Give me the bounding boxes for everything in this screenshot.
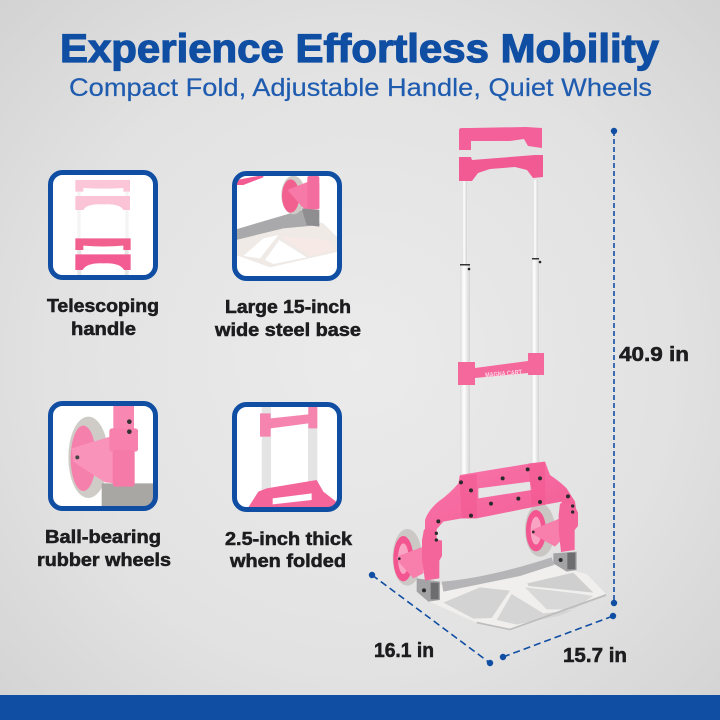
title: Experience Effortless Mobility: [60, 27, 660, 71]
panel: folded thickness: [225, 404, 353, 571]
caption: [225, 529, 353, 571]
steel base plate: [417, 557, 606, 630]
caption: when folded: [229, 551, 346, 571]
frame: [50, 172, 156, 278]
caption: Telescoping: [47, 296, 159, 316]
thumbnail: steel base: [234, 174, 340, 278]
middle bracket with logo: [458, 353, 544, 385]
dimension: height: [611, 128, 689, 606]
caption: Large 15-inch: [225, 297, 351, 317]
panel: steel base: [214, 174, 361, 340]
thumbnail: telescoping handle: [50, 172, 156, 278]
panel: rubber wheels: [37, 404, 171, 570]
pink frame: [397, 462, 578, 581]
caption: rubber wheels: [37, 550, 171, 570]
telescoping poles: [460, 180, 541, 480]
caption: 2.5-inch thick: [225, 529, 353, 549]
panel: telescoping handle: [47, 172, 159, 339]
second handle grip: [459, 155, 543, 181]
length value: 16.1 in: [374, 640, 434, 662]
width line: [503, 616, 613, 657]
caption: [214, 297, 361, 340]
back wheel: [525, 503, 555, 557]
caption: handle: [71, 319, 136, 339]
thumbnail: folded cart: [234, 404, 340, 510]
frame: [234, 404, 340, 510]
frame bolts: [398, 467, 574, 592]
caption: Ball-bearing: [45, 527, 161, 547]
hand truck product image: [393, 127, 606, 630]
left wheel: [393, 529, 422, 586]
thumbnail: rubber wheels: [50, 404, 156, 508]
top handle grip: [459, 127, 542, 150]
subtitle: Compact Fold, Adjustable Handle, Quiet Wheels: [69, 74, 652, 102]
caption: [37, 527, 171, 570]
bottom bar: [0, 695, 720, 720]
height line: [613, 131, 615, 603]
frame: [50, 404, 156, 508]
caption: [47, 296, 159, 339]
width value: 15.7 in: [563, 645, 627, 667]
middle bracket with logo: MAGNA CART: [485, 369, 523, 380]
frame: [234, 174, 340, 278]
axle brackets: [417, 552, 577, 602]
height value: 40.9 in: [619, 344, 689, 366]
dimension: length: [369, 572, 493, 666]
dimension: width: [500, 613, 627, 667]
caption: wide steel base: [214, 320, 361, 340]
length line: [372, 575, 490, 663]
